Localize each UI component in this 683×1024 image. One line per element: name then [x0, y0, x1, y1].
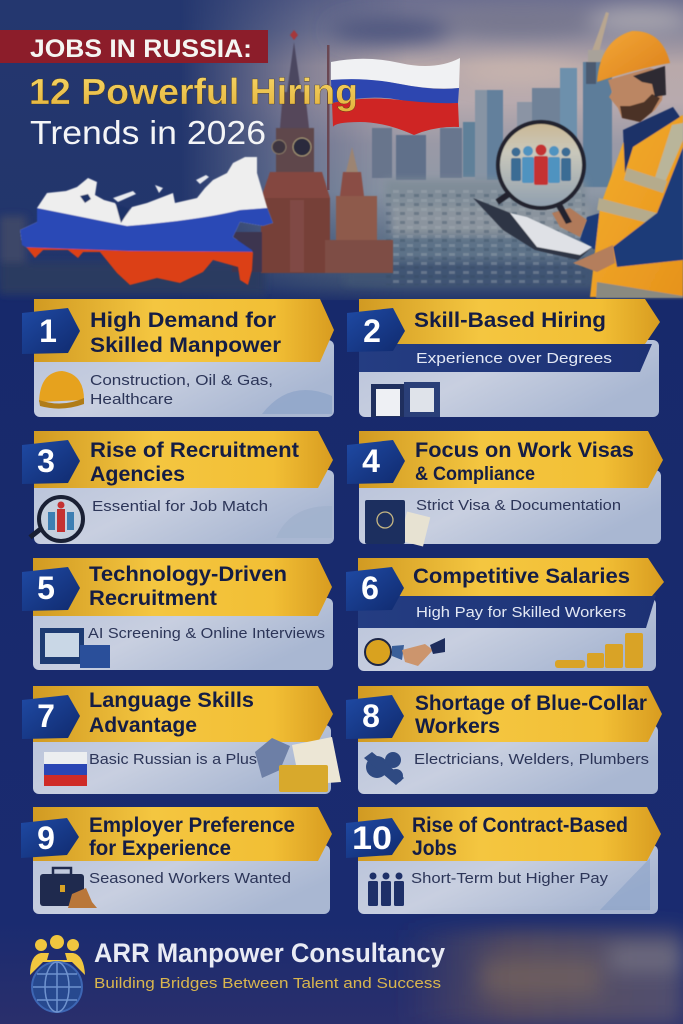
footer city backdrop: [400, 930, 683, 1024]
panel 5: technology-driven recruitment: [22, 558, 333, 670]
panel 1: high demand: Construction, Oil & Gas,: [90, 372, 273, 389]
panel 2: skill-based hiring: [347, 299, 660, 417]
icon: toolbox and papers: [255, 737, 341, 792]
company logo: [30, 935, 85, 1012]
panel 4: visas and compliance: [347, 431, 663, 546]
icon: magnifier with people: [28, 497, 83, 541]
panel 3: recruitment agencies: [22, 431, 334, 544]
panel 9: experience preference: 9: [37, 820, 55, 856]
panel 6: competitive salaries: [346, 558, 664, 671]
panel 2: skill-based hiring: Experience over Degrees: [416, 350, 612, 367]
icon: gears: [364, 752, 404, 785]
panel 8: blue-collar shortage: [346, 686, 662, 794]
panel 3: recruitment agencies: Rise of Recruitment: [90, 439, 299, 462]
company name: ARR Manpower Consultancy: [94, 938, 445, 968]
panel 10: contract-based jobs: Jobs: [412, 837, 457, 860]
icon: workers trio: [368, 872, 404, 906]
icon: checklists: [371, 382, 440, 417]
icon: mini flag: [44, 752, 87, 786]
Kremlin towers: [232, 30, 393, 273]
icon: briefcase and coins: [40, 868, 97, 908]
map of Russia in flag colours: [20, 156, 274, 286]
panel 5: technology-driven recruitment: Technology-Driven: [89, 563, 287, 586]
title line 1: JOBS IN RUSSIA:: [30, 35, 252, 63]
panel 9: experience preference: [21, 807, 332, 914]
panel 9: experience preference: Employer Preference: [89, 814, 295, 837]
tagline: Building Bridges Between Talent and Success: [94, 975, 441, 992]
title line 2: 12 Powerful Hiring: [29, 71, 358, 112]
panel 5: technology-driven recruitment: 5: [37, 570, 55, 606]
panel 10: contract-based jobs: Rise of Contract-Based: [412, 814, 628, 837]
panel 6: competitive salaries: Competitive Salaries: [413, 565, 630, 588]
panel 6: competitive salaries: High Pay for Skilled Workers: [416, 604, 626, 621]
panel 7: language skills: Basic Russian is a Plus: [89, 751, 257, 768]
panel 1: high demand: [22, 299, 334, 417]
panel 4: visas and compliance: Strict Visa & Documentation: [416, 497, 621, 514]
hero scene: sky and city: [0, 0, 683, 300]
title line 3: Trends in 2026: [30, 114, 266, 151]
title band: [0, 30, 268, 63]
panel 4: visas and compliance: & Compliance: [415, 464, 535, 485]
panel 5: technology-driven recruitment: AI Screening & Online Interviews: [88, 625, 325, 642]
panel 9: experience preference: Seasoned Workers Wanted: [89, 870, 291, 887]
panel 7: language skills: 7: [37, 698, 55, 734]
panel 2: skill-based hiring: Skill-Based Hiring: [414, 309, 606, 332]
magnifier with people icon: [496, 122, 587, 237]
panel 3: recruitment agencies: Agencies: [90, 463, 185, 486]
panel 8: blue-collar shortage: 8: [362, 698, 380, 734]
panel 9: experience preference: for Experience: [89, 837, 231, 860]
flag on pole: [327, 45, 460, 190]
panel 10: contract-based jobs: 10: [352, 820, 392, 856]
icon: hard hat: [39, 371, 84, 409]
panel 8: blue-collar shortage: Workers: [415, 715, 500, 738]
panel 7: language skills: [22, 686, 341, 794]
icon: handshake and coins: [365, 633, 643, 668]
panel 3: recruitment agencies: 3: [37, 443, 55, 479]
panel 10: contract-based jobs: [346, 807, 661, 914]
panel 7: language skills: Language Skills: [89, 689, 254, 712]
panel 10: contract-based jobs: Short-Term but Higher Pay: [411, 870, 609, 887]
panel 8: blue-collar shortage: Shortage of Blue-Collar: [415, 692, 647, 715]
panel 3: recruitment agencies: Essential for Job Match: [92, 498, 268, 515]
panel 5: technology-driven recruitment: Recruitment: [89, 587, 217, 610]
clipboard: [473, 198, 615, 272]
panel 7: language skills: Advantage: [89, 714, 197, 737]
panel 2: skill-based hiring: 2: [363, 313, 381, 349]
icon: passport: [365, 500, 430, 546]
panel 1: high demand: 1: [39, 313, 57, 349]
panel 4: visas and compliance: 4: [362, 443, 380, 479]
panel 8: blue-collar shortage: Electricians, Welders, Plumbers: [414, 751, 649, 768]
panel 1: high demand: Skilled Manpower: [90, 334, 281, 357]
panel 1: high demand: Healthcare: [90, 391, 173, 408]
panel 4: visas and compliance: Focus on Work Visas: [415, 439, 634, 462]
panel 1: high demand: High Demand for: [90, 309, 276, 332]
worker with hard hat: [580, 31, 683, 298]
panel 6: competitive salaries: 6: [361, 570, 379, 606]
icon: screens: [40, 628, 110, 668]
